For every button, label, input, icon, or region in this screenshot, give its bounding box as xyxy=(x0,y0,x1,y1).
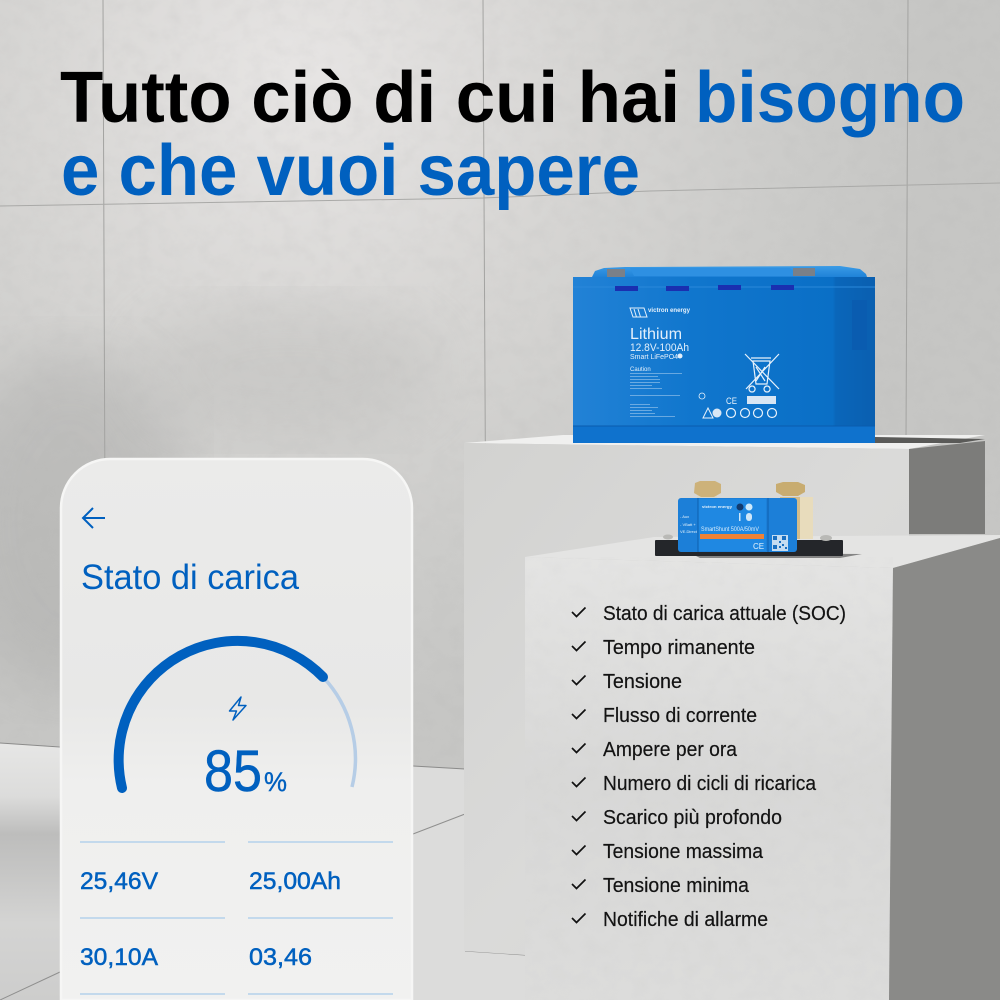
checklist: Notifiche di allarme xyxy=(603,909,768,931)
smart shunt: SmartShunt 500A/50mV xyxy=(701,526,760,533)
checklist: Tensione xyxy=(603,671,682,693)
gauge xyxy=(119,641,355,788)
checklist: Flusso di corrente xyxy=(603,705,757,727)
background: floor xyxy=(0,743,530,1000)
battery label: Smart LiFePO4 xyxy=(630,354,678,361)
battery label: 12.8V-100Ah xyxy=(630,342,689,354)
icon: charging bolt xyxy=(230,697,246,720)
front pedestal xyxy=(525,535,1000,1000)
battery label: Lithium xyxy=(630,326,682,343)
stat grid: 03,46 xyxy=(249,944,312,971)
stat grid: 25,46V xyxy=(80,868,158,895)
stat grid xyxy=(80,842,393,994)
icon: back arrow xyxy=(83,508,105,528)
smart shunt: - Aux xyxy=(680,514,689,519)
battery label: victron energy xyxy=(648,307,690,314)
battery label xyxy=(630,307,690,416)
battery marks xyxy=(699,393,776,418)
checklist: Scarico più profondo xyxy=(603,807,782,829)
checklist: Tensione minima xyxy=(603,875,750,897)
shunt shadow xyxy=(690,553,862,558)
stat grid: 25,00Ah xyxy=(249,868,341,895)
smart shunt: CE xyxy=(753,542,764,551)
smart shunt: - VBatt + xyxy=(680,522,696,527)
checklist: Numero di cicli di ricarica xyxy=(603,773,817,795)
checklist: Tensione massima xyxy=(603,841,764,863)
smart shunt: VE.Direct xyxy=(680,529,698,534)
title: e che vuoi sapere xyxy=(61,131,640,211)
checklist: Tempo rimanente xyxy=(603,637,755,659)
title: Tutto ciò di cui hai xyxy=(60,58,680,138)
stat grid: 30,10A xyxy=(80,944,158,971)
back pedestal xyxy=(464,435,985,955)
checklist: Ampere per ora xyxy=(603,739,738,761)
background: concrete wall xyxy=(0,0,1000,770)
card background xyxy=(61,459,412,1000)
battery slots xyxy=(615,285,794,291)
panel: battery app card xyxy=(61,459,412,1000)
shunt brass bolts xyxy=(697,494,717,500)
smart shunt: victron energy xyxy=(702,504,733,509)
checklist: Stato di carica attuale (SOC) xyxy=(603,603,846,625)
battery label: Caution xyxy=(630,367,651,373)
check items xyxy=(572,608,586,922)
shunt base xyxy=(655,540,843,556)
battery lid xyxy=(592,266,867,277)
smart shunt xyxy=(655,481,862,558)
title: bisogno xyxy=(695,58,965,138)
shunt body xyxy=(678,498,797,552)
checklist xyxy=(572,603,846,931)
gauge value: 85 xyxy=(204,739,262,804)
title xyxy=(60,58,965,211)
gauge value: % xyxy=(264,767,287,797)
battery body xyxy=(573,277,875,443)
card heading: Stato di carica xyxy=(81,558,300,597)
battery xyxy=(573,266,875,443)
battery marks: CE xyxy=(726,396,737,406)
battery recycling icon xyxy=(745,354,779,392)
